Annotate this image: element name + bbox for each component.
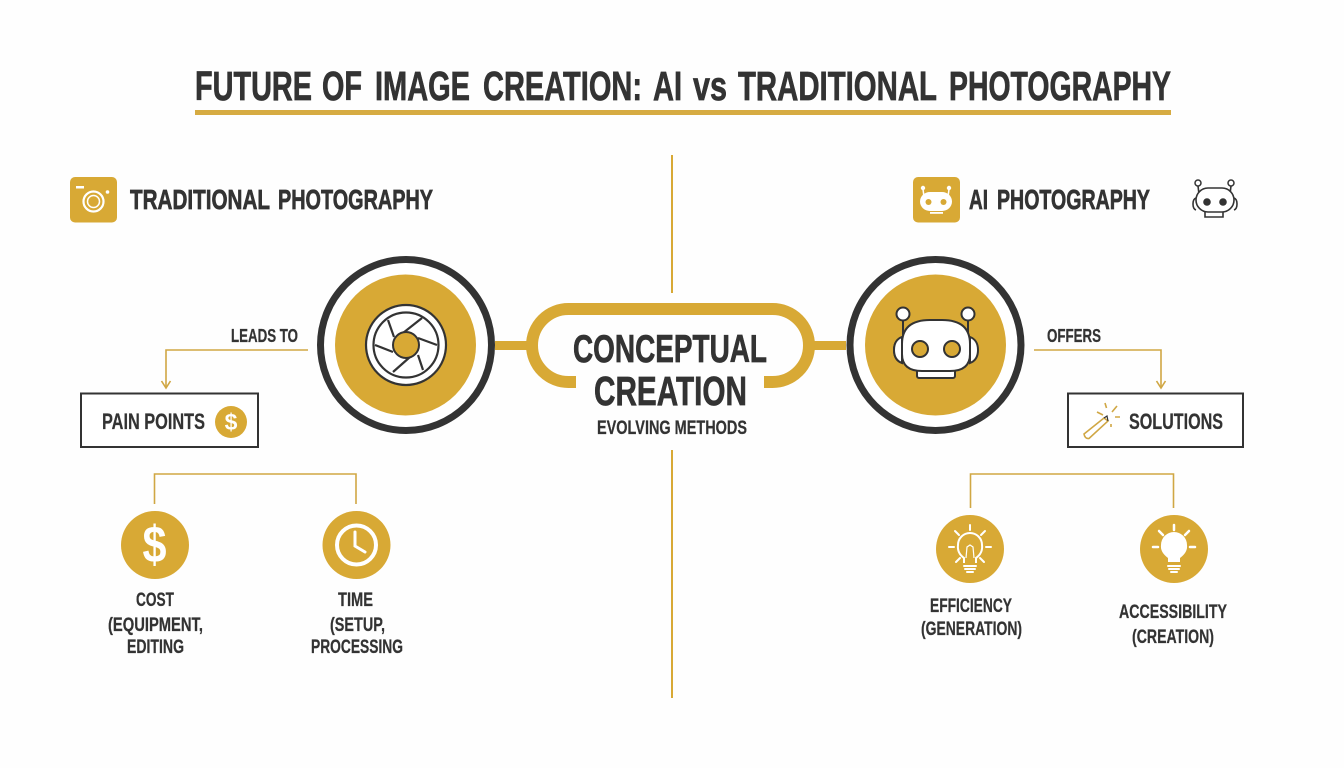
- item: time: TIME: [338, 590, 373, 611]
- heading: ai photography: [969, 184, 1150, 215]
- item: time: [311, 511, 403, 658]
- bracket: solution branches: [970, 474, 1174, 508]
- icon: robot in ring: [850, 260, 1021, 430]
- box: solutions: SOLUTIONS: [1129, 409, 1223, 434]
- panel: conceptual creation hub: [495, 309, 846, 439]
- panel: conceptual creation hub: CONCEPTUAL: [573, 328, 767, 371]
- item: accessibility: (CREATION): [1132, 627, 1214, 648]
- box: pain points: PAIN POINTS: [102, 409, 205, 434]
- box: pain points: [81, 394, 258, 447]
- item: efficiency: [921, 515, 1022, 640]
- title: TRADITIONAL: [738, 63, 937, 109]
- icon: camera aperture in ring: [320, 260, 492, 430]
- item: efficiency: EFFICIENCY: [930, 596, 1012, 617]
- heading: traditional photography: PHOTOGRAPHY: [278, 184, 433, 215]
- title: CREATION:: [483, 63, 642, 109]
- panel: ai photography: [850, 177, 1243, 648]
- title: vs: [693, 63, 727, 109]
- icon: camera badge: [70, 177, 117, 222]
- bracket: pain point branches: [154, 474, 356, 504]
- box: pain points: $: [225, 409, 238, 435]
- heading: ai photography: AI: [969, 184, 988, 215]
- title: [195, 63, 1171, 115]
- title: AI: [653, 63, 682, 109]
- connector: leads to: [162, 326, 308, 388]
- item: accessibility: ACCESSIBILITY: [1119, 602, 1227, 623]
- box: solutions: [1068, 394, 1243, 447]
- item: cost: EDITING: [127, 637, 184, 658]
- item: time: PROCESSING: [311, 637, 403, 658]
- title: IMAGE: [375, 63, 470, 109]
- item: time: (SETUP,: [330, 615, 385, 636]
- title: FUTURE: [195, 63, 312, 109]
- connector: leads to: LEADS TO: [231, 326, 298, 346]
- item: cost: (EQUIPMENT,: [108, 615, 203, 636]
- panel: conceptual creation hub: EVOLVING METHODS: [597, 418, 747, 439]
- item: accessibility: [1119, 515, 1227, 648]
- item: cost: COST: [136, 590, 174, 611]
- item: efficiency: (GENERATION): [921, 619, 1022, 640]
- heading: traditional photography: [130, 184, 433, 215]
- connector: offers: [1034, 326, 1166, 388]
- panel: traditional photography: [70, 177, 492, 658]
- item: cost: $: [142, 516, 167, 574]
- heading: ai photography: PHOTOGRAPHY: [997, 184, 1150, 215]
- item: cost: [108, 511, 203, 658]
- panel: conceptual creation hub: CREATION: [594, 368, 747, 414]
- heading: traditional photography: TRADITIONAL: [130, 184, 270, 215]
- title: OF: [322, 63, 362, 109]
- icon: magic wand: [1084, 403, 1120, 439]
- icon: robot badge: [913, 177, 960, 222]
- connector: offers: OFFERS: [1047, 326, 1101, 346]
- icon: small robot outline: [1193, 180, 1237, 217]
- title: PHOTOGRAPHY: [949, 63, 1171, 109]
